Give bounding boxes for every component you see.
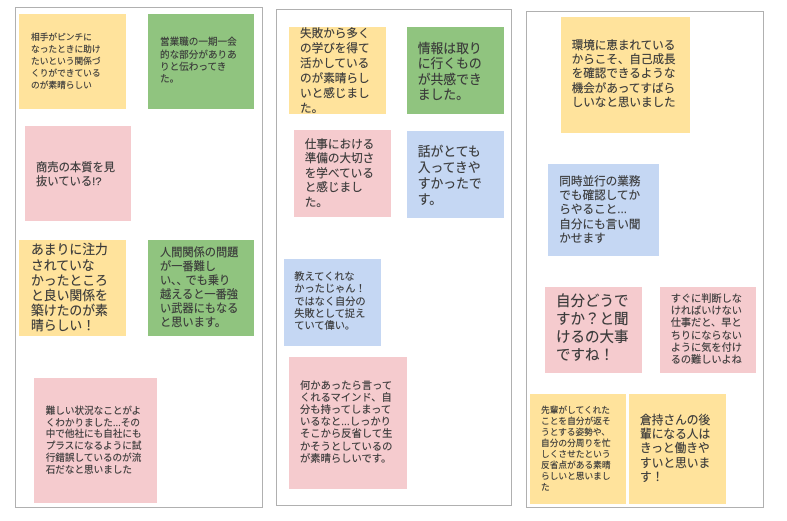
note text: ように気を付け <box>671 343 742 354</box>
note text: かせます <box>559 232 606 245</box>
sticky note: pink, trial and error <box>34 378 157 503</box>
note text: 自分にも言い聞 <box>559 218 640 231</box>
note text: かったところ <box>31 273 108 288</box>
note text: しいなと思いました <box>572 97 676 109</box>
note text: い､､ でも乗り <box>160 275 230 287</box>
note text: い武器にもなる <box>160 303 238 315</box>
note text: すぐに判断しな <box>671 294 742 305</box>
note text: 営業職の一期一会 <box>160 37 237 48</box>
note text: が一番難し <box>160 261 216 273</box>
note text: すか？と聞 <box>556 312 628 328</box>
note text: 情報は取り <box>418 41 482 56</box>
note text: くりができている <box>31 68 100 78</box>
note text: 石だなと思いました <box>46 465 132 476</box>
note text <box>31 32 100 90</box>
sticky note: green, sales once-in-a-lifetime encounter <box>148 14 254 108</box>
note text <box>300 380 392 465</box>
note text <box>640 414 710 484</box>
sticky note: blue, concurrent tasks <box>548 164 659 256</box>
note text: を学べている <box>305 167 374 180</box>
note text: 難しい状況なことがよ <box>46 406 141 417</box>
note text: 分も持ってしまって <box>300 405 391 416</box>
sticky note: yellow, easy to work under Kuramochi <box>629 394 726 504</box>
sticky note: pink, avoiding hasty decisions <box>660 287 756 373</box>
note text: 同時並行の業務 <box>559 174 640 188</box>
note text: 先輩がしてくれた <box>541 404 610 414</box>
note text <box>36 161 115 188</box>
note text: すいと思いま <box>640 457 710 470</box>
note text <box>541 404 610 492</box>
note text: なったときに助け <box>31 44 100 54</box>
note text: 仕事における <box>305 138 374 151</box>
note text <box>305 138 374 209</box>
note text: ではなく自分の <box>294 297 366 308</box>
note text: す。 <box>418 192 442 207</box>
note text: らやること... <box>559 203 627 216</box>
note text: たいという関係づ <box>31 56 100 66</box>
sticky note: yellow, building good relationships <box>19 240 126 336</box>
sticky note: blue, easy to follow talk <box>407 131 504 218</box>
note text <box>559 174 640 245</box>
note text: あまりに注力 <box>31 242 108 257</box>
note text: からこそ、自己成長 <box>572 54 676 66</box>
note text: うとする姿勢や、 <box>541 427 610 437</box>
note text: きっと働きや <box>640 442 710 455</box>
sticky note: pink, essence of business <box>24 126 131 221</box>
note text: 失敗から多く <box>300 27 370 40</box>
note text: るの難しいよね <box>671 355 742 366</box>
note text: 人間関係の問題 <box>160 247 238 259</box>
panel: right board of sticky notes <box>526 11 764 508</box>
note text: 反省点がある素晴 <box>541 460 610 470</box>
note text: 何かあったら言って <box>300 381 392 392</box>
note text: いるなと...しっかり <box>300 417 391 428</box>
note text: りと伝わってき <box>160 62 226 73</box>
note text: すかったで <box>418 176 482 191</box>
note text: す！ <box>640 471 663 484</box>
note text: に行くもの <box>418 56 482 71</box>
note text: が共感でき <box>418 72 482 87</box>
note text: 相手がピンチに <box>31 32 92 42</box>
note text: 築けたのが素 <box>31 303 108 318</box>
note text: 中で他社にも自社にも <box>46 429 142 440</box>
note text: けるの大事 <box>556 330 628 346</box>
note text: た。 <box>305 196 328 209</box>
note text <box>572 39 676 109</box>
note text: しくさせたという <box>541 449 610 459</box>
panel: middle board of sticky notes <box>276 9 512 506</box>
note text: 教えてくれな <box>294 272 355 283</box>
note text: 行錯誤しているのが流 <box>46 453 141 464</box>
note text: 輩になる人は <box>640 428 710 441</box>
note text: かったじゃん！ <box>294 284 366 295</box>
note text: 自分どうで <box>556 294 628 310</box>
note text <box>160 36 237 85</box>
note text: 晴らしい！ <box>31 318 95 333</box>
note text: た <box>541 482 550 492</box>
note text <box>160 246 238 329</box>
note text: 越えると一番強 <box>160 289 238 301</box>
sticky note: yellow, repaying a senior <box>530 394 626 504</box>
note text: 仕事だと、早と <box>671 318 742 329</box>
note text: と感じまし <box>305 181 363 194</box>
note text: ことを自分が返そ <box>541 416 610 426</box>
note text: ですね！ <box>556 348 614 364</box>
note text: と良い関係を <box>31 288 108 303</box>
note text: が素晴らしいです。 <box>300 454 391 465</box>
note text: 失敗として捉え <box>294 309 365 320</box>
note text: 倉持さんの後 <box>640 414 710 426</box>
sticky note: yellow, learning from failure <box>289 27 386 114</box>
sticky note: pink, reflecting and making use of it <box>289 357 406 489</box>
note text: くれるマインド、自 <box>300 393 392 404</box>
note text <box>418 144 482 207</box>
note text: かそうとしているの <box>300 442 392 453</box>
note text: 抜いている!? <box>36 176 102 188</box>
note text: ければいけない <box>671 306 742 317</box>
note text: の学びを得て <box>300 42 370 55</box>
sticky note: pink, importance of preparation <box>294 130 391 217</box>
note text: でも確認してか <box>559 189 640 202</box>
note text: そこから反省して生 <box>300 429 392 440</box>
note text: 準備の大切さ <box>305 152 374 165</box>
note text: ちりにならない <box>671 331 742 342</box>
sticky note: pink, asking how about you <box>544 287 642 373</box>
note text: 商売の本質を見 <box>36 162 115 174</box>
sticky note: yellow, confirming self growth <box>560 17 690 133</box>
note text: た。 <box>160 74 179 85</box>
note text: と思います。 <box>160 317 226 329</box>
note text: のが素晴らしい <box>31 80 92 90</box>
note text: のが素晴らし <box>300 72 370 85</box>
note text: 機会があってすばら <box>572 83 675 95</box>
note text: ました。 <box>418 87 469 102</box>
note text <box>418 41 482 102</box>
sticky note: blue, owning one's failure <box>284 259 380 346</box>
note text: らしいと思いまし <box>541 471 610 481</box>
note text <box>294 271 366 332</box>
sticky note: green, human relationships as a weapon <box>148 240 254 336</box>
panel: left board of sticky notes <box>15 7 263 508</box>
note text: いと感じまし <box>300 87 370 100</box>
note text: 環境に恵まれている <box>572 40 675 52</box>
note text: 活かしている <box>300 57 369 70</box>
note text: されていな <box>31 258 95 273</box>
note text <box>300 27 370 115</box>
note text: 的な部分がありあ <box>160 50 237 61</box>
note text: を確認できるような <box>572 68 675 80</box>
sticky note: yellow, helping in a pinch <box>19 14 126 108</box>
note text: 話がとても <box>418 144 481 159</box>
note text: 入ってきや <box>418 160 481 175</box>
note text: くわかりました...その <box>46 418 140 429</box>
note text: プラスになるように試 <box>46 441 141 452</box>
note text <box>556 293 628 364</box>
note text <box>31 242 108 333</box>
note text: た。 <box>300 102 323 115</box>
note text: ていて偉い。 <box>294 321 355 332</box>
note text: 自分の分周りを忙 <box>541 438 610 448</box>
note text <box>670 293 742 366</box>
note text <box>46 406 142 476</box>
sticky note: green, going out for information <box>407 27 504 114</box>
